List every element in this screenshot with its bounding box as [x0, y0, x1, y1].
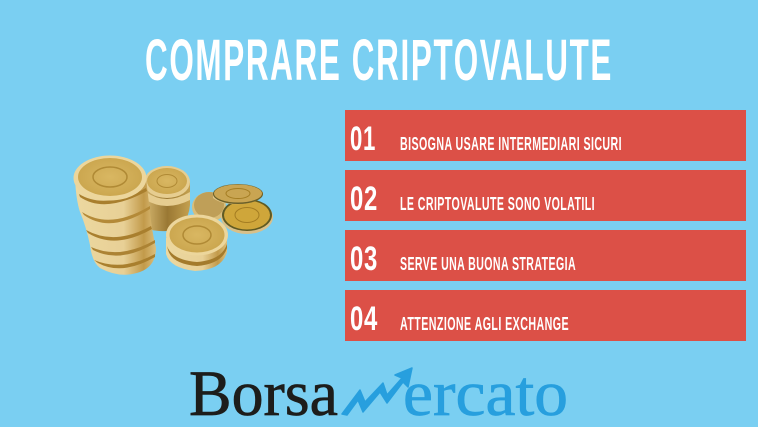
panel: item 01	[345, 110, 746, 161]
coin stack: left tall	[74, 156, 156, 275]
number 01: 01	[350, 120, 376, 158]
panel: item 02	[345, 170, 746, 221]
text: item 04: ATTENZIONE AGLI EXCHANGE	[400, 314, 569, 334]
coin stack: middle	[144, 166, 190, 231]
panel: item 04	[345, 290, 746, 341]
coin stack: front	[166, 214, 228, 271]
icon: stack of gold coins	[74, 156, 273, 275]
number 02: 02	[350, 180, 378, 218]
coin: back flat coin	[192, 192, 226, 222]
coin: right top coin	[213, 184, 263, 204]
text: item 02: LE CRIPTOVALUTE SONO VOLATILI	[400, 194, 595, 214]
coin: right lying coin	[221, 199, 273, 234]
logo: BorsaMercato	[189, 358, 568, 427]
number 03: 03	[350, 240, 378, 278]
panel: item 03	[345, 230, 746, 281]
number 04: 04	[350, 300, 378, 338]
text: item 03: SERVE UNA BUONA STRATEGIA	[400, 254, 576, 274]
icon: rising arrow	[342, 368, 412, 415]
